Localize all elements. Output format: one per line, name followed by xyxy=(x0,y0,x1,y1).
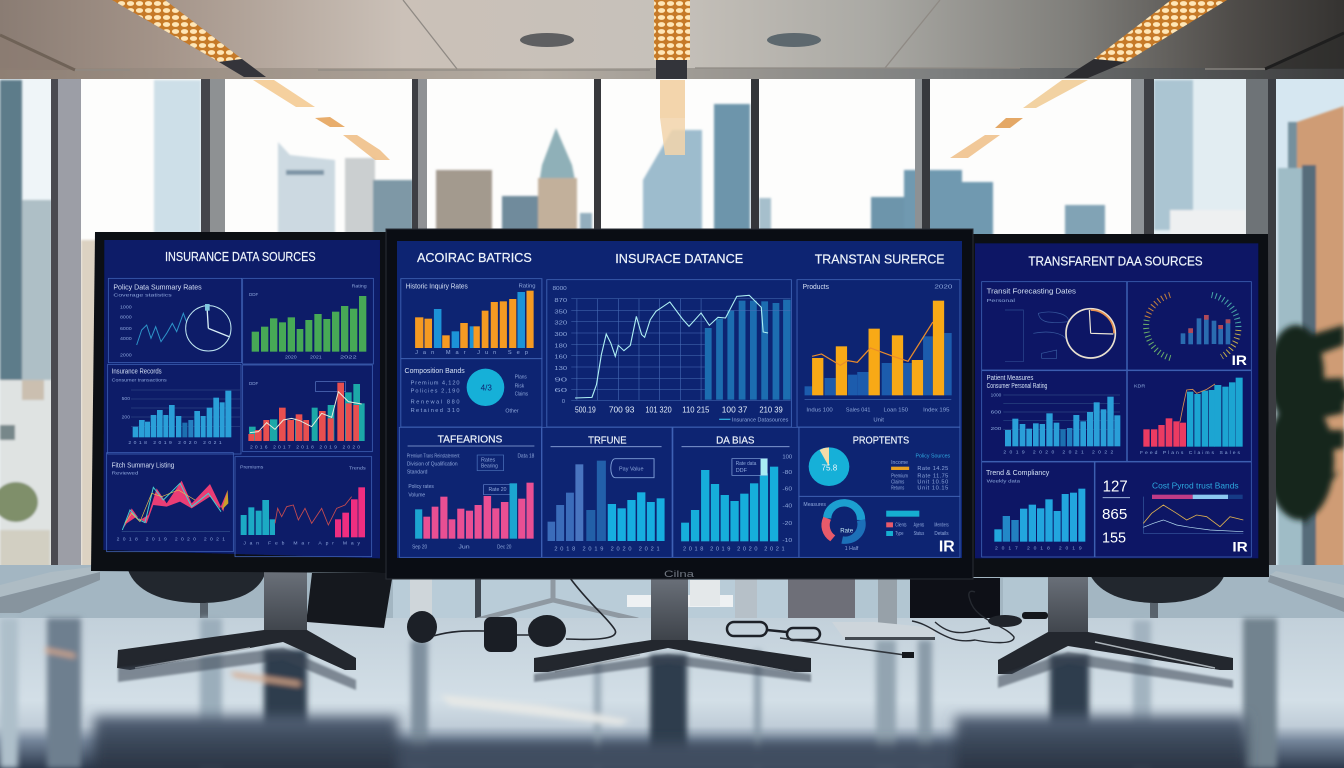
window mullions xyxy=(51,79,1276,579)
panel: pink transactions chart: Rate 20 xyxy=(488,487,507,493)
panel: ring gauge: Type xyxy=(895,531,904,537)
panel: large line chart: Insurance Datasources xyxy=(732,418,789,423)
monitor headings: INSURACE DATANCE xyxy=(615,252,743,266)
monitor headings: ACOIRAC BATRICS xyxy=(417,251,532,265)
panel: ring gauge: Agents xyxy=(914,523,924,529)
panel: pink transactions chart: Policy rates xyxy=(408,484,434,490)
panel: large line chart: 160 xyxy=(554,355,567,361)
right building xyxy=(1288,122,1298,172)
background chair xyxy=(477,580,638,620)
panel: radial gauge xyxy=(1127,282,1251,370)
panel: large line chart: 700 93 xyxy=(609,405,634,414)
panel: orange and blue combo chart: Unit xyxy=(873,418,885,423)
panel: ribbon area chart: Fitch Summary Listing xyxy=(112,460,174,469)
rear device xyxy=(910,578,1000,618)
panel: large line chart: 60 xyxy=(554,388,567,394)
panel: pink transactions chart: Data 18 xyxy=(517,454,534,459)
earbud left xyxy=(407,611,437,643)
right stand xyxy=(998,576,1233,688)
panel: line chart with clock: Coverage statistics xyxy=(113,293,172,299)
panel: properties pie: Income xyxy=(891,460,908,466)
panel: ring gauge: 1 Half xyxy=(845,546,859,552)
panel: orange and blue combo chart: 2020 xyxy=(934,285,952,291)
panel: red and teal combo chart: 2016 2017 2018 2019 2020 xyxy=(250,444,360,450)
panel: orange bar chart: Rating xyxy=(519,284,536,289)
panel: large line chart: 300 xyxy=(554,332,567,338)
panel: green bar chart: 2022 xyxy=(340,354,357,360)
panel: ring gauge: Details xyxy=(934,531,949,537)
panel: data bias bars xyxy=(673,427,799,557)
panel: orange and blue combo chart xyxy=(797,280,960,427)
panel: composition donut: Plans xyxy=(515,375,527,381)
panel: properties pie: Returns xyxy=(891,486,904,491)
panel: blue rising bars xyxy=(982,462,1094,557)
light reflections in window xyxy=(253,80,1088,160)
panel: blue bars: 600 xyxy=(991,409,1002,415)
panel: large line chart: 130 xyxy=(554,366,567,372)
panel: orange and blue combo chart: Products xyxy=(803,282,829,291)
panel: properties pie: Policy Sources xyxy=(916,454,950,459)
panel: data bias bars: 2018 2019 2020 2021 xyxy=(683,547,785,553)
panel: composition donut: Retained 310 xyxy=(411,408,460,414)
screen xyxy=(975,243,1258,558)
panel: ring gauge: Measures xyxy=(803,502,826,508)
key numbers: 865 xyxy=(1102,507,1127,523)
panel: pink transactions chart xyxy=(399,427,542,557)
panel: pink transactions chart: TAFEARIONS xyxy=(438,434,502,445)
panel: properties pie: Rate 11.75 xyxy=(917,474,948,479)
panel: orange and blue combo chart: Sales 041 xyxy=(846,408,870,413)
panel: blue bars: Patient Measures xyxy=(987,373,1034,382)
panel: blue bar chart: 200 xyxy=(122,414,130,420)
panel: blue bar chart xyxy=(108,364,241,454)
panel: properties pie: Unit 10.15 xyxy=(917,486,948,491)
key numbers xyxy=(1102,479,1130,547)
panel: pink transactions chart: Standard xyxy=(407,470,428,475)
center monitor xyxy=(386,229,973,579)
left stand xyxy=(117,572,356,690)
panel: composition donut xyxy=(401,359,542,427)
monitor heading: INSURANCE DATA SOURCES xyxy=(165,250,316,264)
panel: pink transactions chart: Sep 20 xyxy=(412,545,427,550)
panel: blue rising bars: Trend & Compliancy xyxy=(986,468,1050,477)
panel: trend bars xyxy=(542,427,672,557)
panel: large line chart: 320 xyxy=(554,321,567,327)
panel: composition donut: Renewal 880 xyxy=(411,400,460,405)
panel: properties pie: 75.8 xyxy=(821,463,838,473)
panel: large line chart: 210 39 xyxy=(759,405,783,414)
panel: properties pie: Unit 10.50 xyxy=(917,480,948,485)
panel: ring gauge xyxy=(799,496,960,557)
panel: key figures and trend lines: Cost Pyrod trust Bands xyxy=(1152,481,1239,491)
panel: blue rising bars: 2017 2018 2019 xyxy=(995,545,1082,551)
screen background xyxy=(397,241,962,558)
panel: clock diagram xyxy=(982,282,1127,370)
panel: teal and pink bars with line xyxy=(235,457,372,557)
panel: teal and pink bars with line: Premiums xyxy=(240,464,264,470)
skyline buildings xyxy=(0,80,1344,588)
panel: properties pie: PROPTENTS xyxy=(853,435,909,446)
panel: ribbon area chart: 2018 2019 2020 2021 xyxy=(117,537,225,543)
panel: data bias bars: DDF xyxy=(736,468,748,474)
key numbers: 127 xyxy=(1103,479,1128,496)
panel: trend bars: TRFUNE xyxy=(588,435,627,446)
panel: blue bar chart: Insurance Records xyxy=(112,366,162,375)
panel: red and blue step bars: Feed Plans Claims Sales xyxy=(1140,450,1240,456)
panel: blue bars: 2019 2020 2021 2022 xyxy=(1003,449,1114,455)
panel: trend bars: Pay Value xyxy=(619,467,644,473)
floor behind desk xyxy=(0,565,1344,621)
panel: data bias bars: 100 xyxy=(782,455,792,461)
panel: large line chart: 100 37 xyxy=(722,405,747,414)
panel: large line chart: 110 215 xyxy=(682,405,709,414)
panel: blue bars: Consumer Personal Rating xyxy=(987,381,1047,390)
panel: orange and blue combo chart: Index 195 xyxy=(923,408,949,413)
panel: data bias bars: -20 xyxy=(782,521,792,527)
panel: pink transactions chart: Jun xyxy=(458,545,470,550)
panel: red and teal combo chart xyxy=(243,365,372,452)
panel: ring gauge: Status xyxy=(914,531,924,537)
panel: red and blue step bars xyxy=(1127,371,1251,461)
panel: large line chart: 101 320 xyxy=(645,405,672,414)
center stand xyxy=(534,578,811,682)
ceiling lights xyxy=(112,0,1227,79)
plant xyxy=(1266,325,1344,525)
panel: blue rising bars: Weekly data xyxy=(987,478,1020,484)
panel: blue bar chart: 500 xyxy=(122,396,130,402)
panel: line chart with clock: 8000 xyxy=(120,314,132,320)
panel: data bias bars: DA BIAS xyxy=(716,435,755,446)
ceiling speakers xyxy=(520,33,821,47)
panel: ring gauge: Rate xyxy=(840,528,854,535)
panel: data bias bars: -40 xyxy=(782,504,792,509)
panel: pink transactions chart: Dec 20 xyxy=(497,545,511,550)
logo: IR xyxy=(1232,539,1248,555)
panel: composition donut: 4/3 xyxy=(481,383,492,393)
panel: pink transactions chart: Volume xyxy=(408,493,425,499)
monitor heading: TRANSFARENT DAA SOURCES xyxy=(1028,254,1203,268)
panel: line chart with clock: 1000 xyxy=(120,304,132,310)
panel: composition donut: Composition Bands xyxy=(405,366,465,375)
ceiling xyxy=(0,0,1344,160)
panel: line chart with clock: 4000 xyxy=(120,336,132,342)
panel: blue bars: 200 xyxy=(991,426,1002,432)
desk surface xyxy=(0,618,1344,768)
tablet xyxy=(307,573,393,628)
panel: pink transactions chart: Premium Trans Reinstatement xyxy=(407,454,460,459)
panel: trend bars: 2018 2019 2020 2021 xyxy=(554,547,660,553)
key numbers: 155 xyxy=(1102,531,1126,547)
panel: large line chart: 350 xyxy=(554,310,567,315)
panel: large line chart: 8000 xyxy=(552,286,567,292)
panel: ring gauge: Clients xyxy=(895,523,907,529)
panel: composition donut: Risk xyxy=(515,384,525,389)
panel: data bias bars: -10 xyxy=(782,538,792,544)
monitor headings: TRANSTAN SURERCE xyxy=(815,252,945,266)
monitor stands xyxy=(117,572,1233,690)
panel: red and teal combo chart: DDF xyxy=(249,381,258,387)
panel: properties pie: Rate 14.25 xyxy=(917,466,948,472)
panel: line chart with clock: 6000 xyxy=(120,326,132,332)
screen xyxy=(103,240,380,558)
left monitor xyxy=(91,232,388,573)
plate xyxy=(832,622,935,640)
panel: properties pie: Claims xyxy=(891,480,905,485)
panel: ribbon area chart xyxy=(107,453,233,552)
panel: pink transactions chart: Bearing xyxy=(481,464,498,469)
desk objects: tablet, earbuds, cables, glasses xyxy=(307,573,1048,658)
panel: green bar chart: 2021 xyxy=(310,354,322,360)
panel: large line chart: 0 xyxy=(562,399,565,405)
panel: line chart with clock: Policy Data Summary Rates xyxy=(113,282,202,291)
right monitor xyxy=(973,234,1269,577)
panel: orange and blue combo chart: Loan 150 xyxy=(884,408,908,413)
panel: data bias bars: Rate data xyxy=(736,461,756,467)
monitor headings xyxy=(417,251,945,266)
panel: pink transactions chart: Rates xyxy=(481,458,496,464)
panel: large line chart xyxy=(547,280,791,427)
manufacturer logo: Cilna xyxy=(664,569,694,579)
panel: large line chart: 90 xyxy=(554,378,567,383)
panel: green bar chart: DDF xyxy=(249,292,258,298)
panel: green bar chart xyxy=(243,278,373,364)
panel: composition donut: Other xyxy=(505,409,519,414)
panel: blue bars: 1000 xyxy=(991,393,1002,399)
panel: ring gauge: Members xyxy=(934,523,949,529)
glasses xyxy=(727,622,820,640)
panel: clock diagram: Transit Forecasting Dates xyxy=(987,286,1076,295)
panel: orange bar chart: Jan Mar Jun Sep xyxy=(415,350,528,356)
panel: composition donut: Premium 4,120 xyxy=(411,381,460,387)
panel: large line chart: 180 xyxy=(554,344,567,349)
panel: properties pie xyxy=(799,427,960,496)
earbud right xyxy=(528,615,566,647)
logo: IR xyxy=(1232,352,1247,368)
chairs behind monitors xyxy=(128,570,1226,619)
panel: ribbon area chart: Reviewed xyxy=(112,470,139,476)
panel: clock diagram: Personal xyxy=(987,298,1015,304)
panel: green bar chart: 2020 xyxy=(285,354,297,360)
panel: red and blue step bars: KDR xyxy=(1134,383,1146,389)
panel: teal and pink bars with line: Jan Feb Mar Apr May xyxy=(243,541,360,547)
panel: large line chart: 870 xyxy=(554,298,567,304)
panel: key figures and trend lines xyxy=(1095,462,1251,557)
earbud center xyxy=(484,617,517,652)
logo: IR xyxy=(939,538,955,555)
panel: blue bars xyxy=(982,371,1127,461)
panel: composition donut: Claims xyxy=(515,392,528,398)
panel: data bias bars: -80 xyxy=(782,470,792,476)
panel: composition donut: Policies 2,190 xyxy=(411,389,460,395)
panel: teal and pink bars with line: Trends xyxy=(349,465,366,471)
panel: pink transactions chart: Division of Qualification xyxy=(407,462,458,467)
panel: line chart with clock: 2000 xyxy=(120,353,132,359)
panel: line chart with clock xyxy=(108,278,242,363)
panel: green bar chart: Rating xyxy=(352,283,367,289)
panel: orange bar chart xyxy=(401,279,542,359)
panel: blue bar chart: 2018 2019 2020 2021 xyxy=(128,440,222,446)
panel: data bias bars: -60 xyxy=(782,487,792,493)
panel: blue bar chart: Consumer transactions xyxy=(112,378,167,384)
panel: large line chart: 500.19 xyxy=(575,405,596,414)
panel: orange bar chart: Historic Inquiry Rates xyxy=(406,282,468,291)
panel: properties pie: Premium xyxy=(891,474,908,479)
panel: orange and blue combo chart: Indus 100 xyxy=(806,408,833,413)
